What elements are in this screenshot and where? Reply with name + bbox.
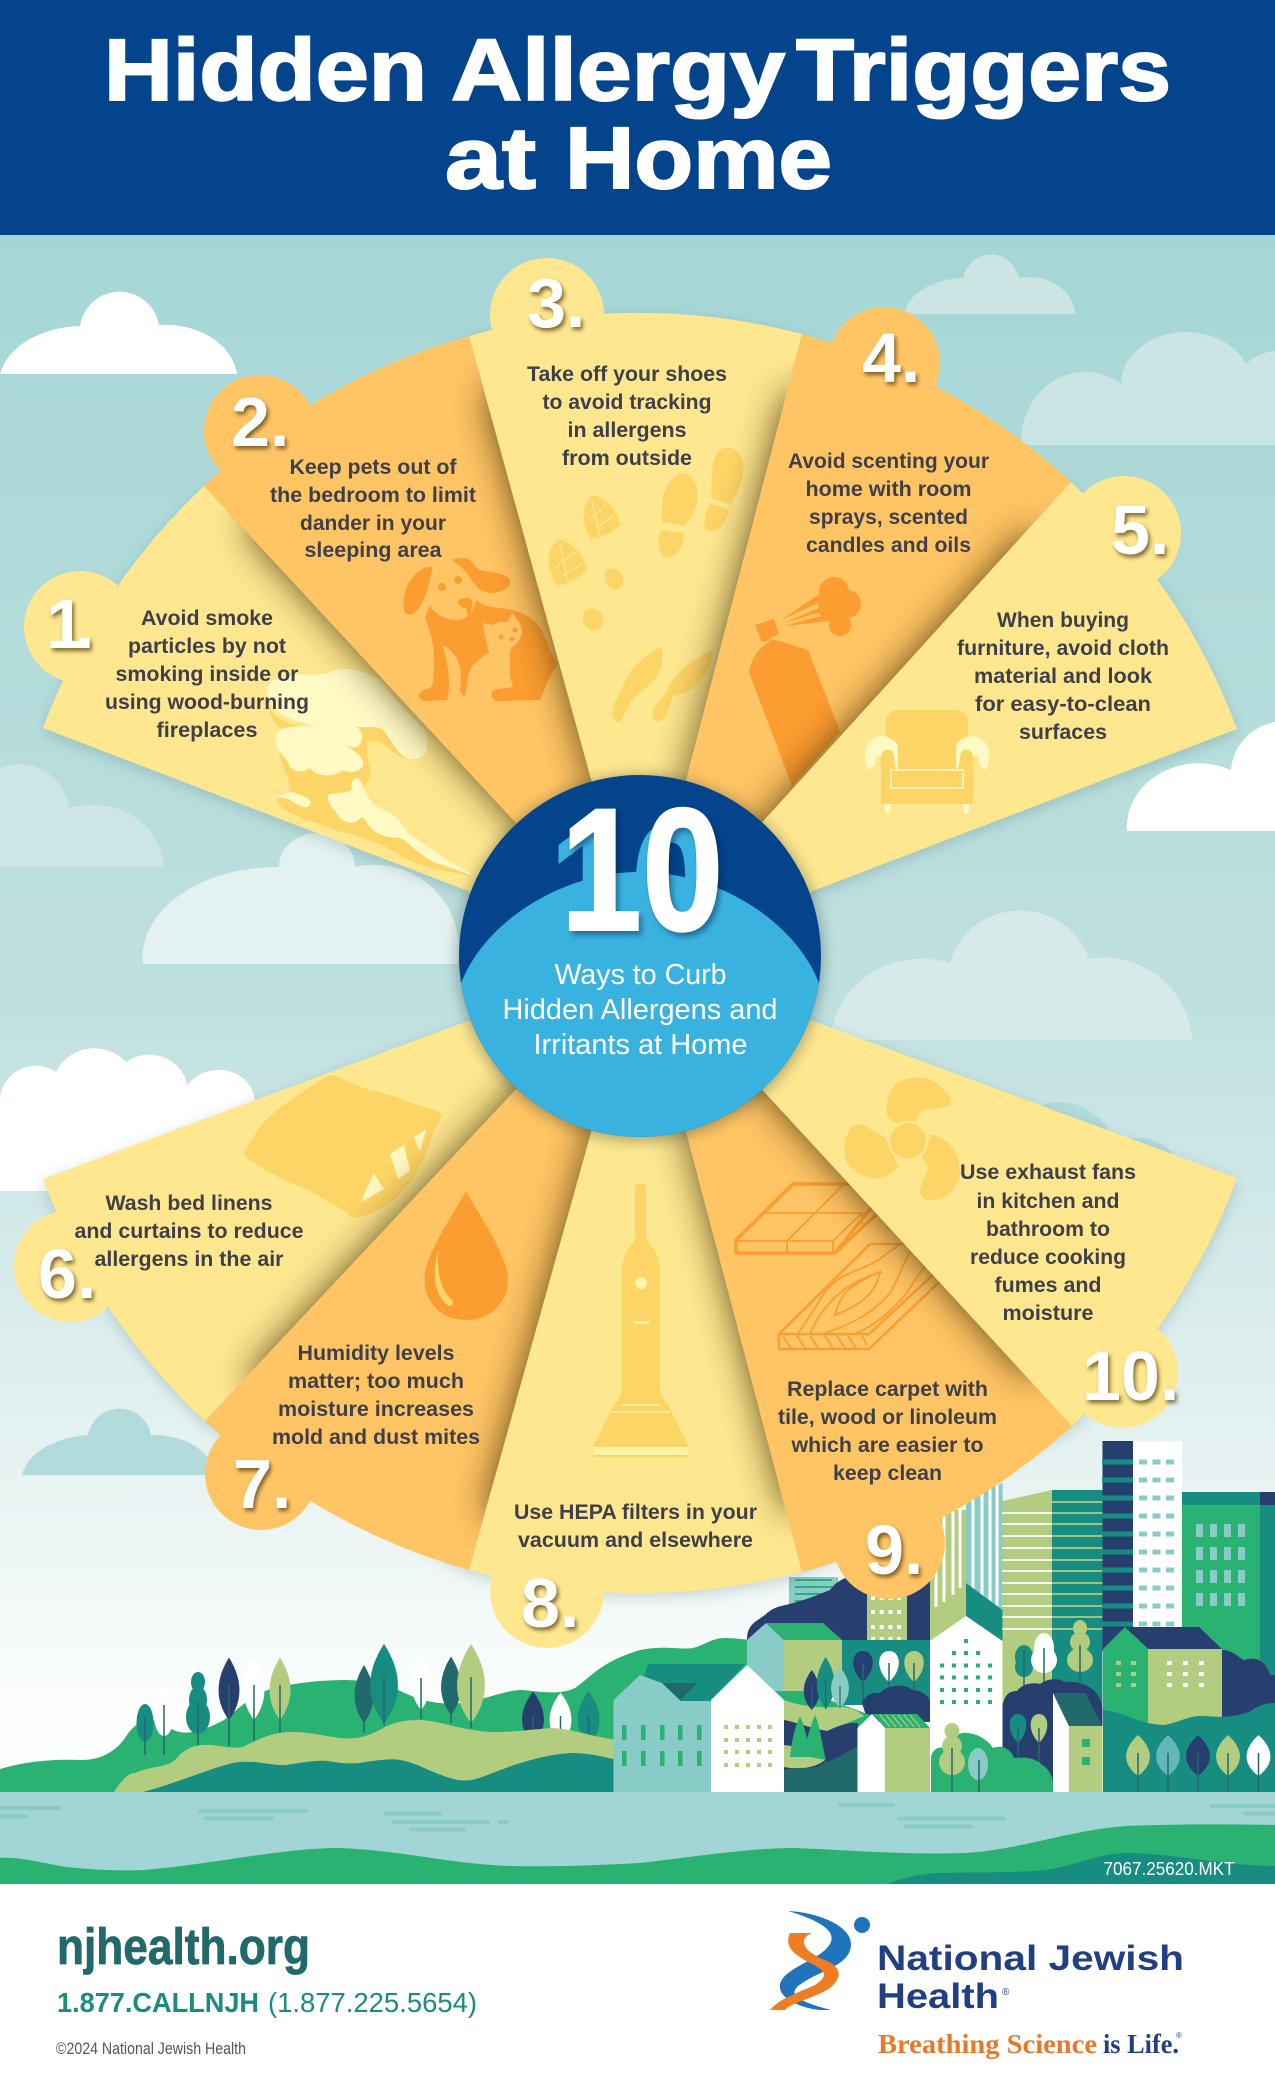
icon: smoke — [267, 669, 474, 877]
panel 2: pets — [204, 336, 640, 957]
text: panel 4: sprays, scented — [809, 505, 968, 529]
center subtitle — [502, 959, 778, 1061]
logo: National Jewish Health: is Life. — [1103, 2029, 1179, 2059]
sky background — [0, 235, 1275, 1885]
footer contact block: ©2024 National Jewish Health — [56, 2039, 246, 2058]
text: panel 1: using wood-burning — [105, 690, 309, 714]
panel 10: exhaust fans — [640, 957, 1237, 1428]
text: panel 5: When buying — [997, 608, 1129, 632]
logo: National Jewish Health: National Jewish — [877, 1939, 1184, 1978]
text: panel 2: dander in your — [300, 511, 447, 535]
text: panel 2: the bedroom to limit — [270, 483, 476, 507]
text: panel 9: which are easier to — [791, 1433, 984, 1457]
step numbers: 4. — [862, 319, 920, 397]
icon: vacuum cleaner — [594, 1183, 688, 1457]
text: panel 10: Use exhaust fans — [960, 1160, 1136, 1184]
center subtitle: Irritants at Home — [534, 1029, 748, 1061]
text: panel 6 — [74, 1191, 304, 1271]
text: panel 10: fumes and — [994, 1273, 1102, 1297]
step numbers: 6. — [38, 1235, 96, 1313]
text: panel 9 — [778, 1377, 997, 1485]
text: panel 3 — [527, 362, 727, 470]
panel 3: shoes — [469, 258, 802, 957]
panel 9: carpet replacement — [640, 957, 1072, 1599]
icon: fan — [844, 1078, 960, 1200]
title banner: Hidden — [104, 22, 427, 119]
panel 6: bed linens — [14, 957, 640, 1421]
big number 10: 10 — [560, 773, 724, 968]
text: panel 10: in kitchen and — [976, 1189, 1120, 1213]
center subtitle: Ways to Curb — [554, 959, 726, 991]
icon: dog and cat — [404, 558, 558, 701]
job code: 7067.25620.MKT — [1104, 1859, 1235, 1879]
text: panel 10: bathroom to — [986, 1217, 1110, 1241]
text: panel 3: Take off your shoes — [527, 362, 727, 386]
icon: pillow — [244, 1075, 441, 1218]
landscape: hills and trees — [0, 1638, 760, 1792]
center subtitle: Hidden Allergens and — [502, 994, 778, 1026]
text: panel 6: and curtains to reduce — [74, 1219, 304, 1243]
text: panel 10 — [960, 1160, 1136, 1325]
step numbers: 7. — [233, 1445, 291, 1523]
text: panel 2: sleeping area — [304, 538, 443, 562]
text: panel 8: vacuum and elsewhere — [518, 1528, 753, 1552]
panel 8: HEPA filters — [469, 957, 802, 1648]
text: panel 5: surfaces — [1019, 720, 1107, 744]
step numbers: 8. — [521, 1564, 579, 1642]
text: panel 4 — [788, 449, 990, 557]
title banner: Allergy — [451, 22, 785, 119]
step numbers — [38, 264, 1179, 1642]
footer contact block — [56, 1918, 477, 2058]
text: panel 1: smoking inside or — [116, 662, 299, 686]
title banner: Triggers — [796, 22, 1171, 119]
text: panel 1: particles by not — [128, 634, 286, 658]
text: panel 2 — [270, 455, 476, 562]
city skyline — [614, 1441, 1275, 1792]
icon: helix mark — [770, 1911, 870, 2010]
text: panel 7: moisture increases — [278, 1397, 474, 1421]
step numbers: 2. — [231, 383, 289, 461]
step numbers: . — [75, 585, 94, 663]
logo: National Jewish Health: ® — [1176, 2031, 1182, 2040]
text: panel 1: Avoid smoke — [141, 606, 273, 630]
text: panel 10: reduce cooking — [970, 1245, 1126, 1269]
text: panel 7: matter; too much — [288, 1369, 464, 1393]
panel 5: furniture — [640, 476, 1237, 957]
step numbers: 3. — [527, 264, 585, 342]
title banner: at — [445, 110, 536, 207]
footer contact block: (1.877.225.5654) — [268, 1987, 477, 2018]
center circle shadow — [457, 775, 823, 1141]
text: panel 4: candles and oils — [806, 533, 971, 557]
text: panel 5: furniture, avoid cloth — [957, 636, 1169, 660]
step numbers: 10. — [1082, 1337, 1179, 1415]
icon: water drop — [424, 1191, 508, 1320]
logo: National Jewish Health: Health — [877, 1977, 999, 2016]
text: panel 1: fireplaces — [156, 718, 258, 742]
icon: spray can — [749, 577, 861, 786]
text: panel 5 — [957, 608, 1169, 744]
blue offset of number 10: 10 — [548, 789, 712, 984]
title banner — [0, 0, 1275, 235]
logo: National Jewish Health: ® — [1002, 1987, 1010, 1998]
text: panel 5: material and look — [974, 664, 1152, 688]
step numbers: 9. — [865, 1511, 923, 1589]
text: panel 8 — [514, 1500, 758, 1552]
text: panel 1 — [105, 606, 309, 742]
text: panel 7: mold and dust mites — [272, 1425, 480, 1449]
icon: armchair — [865, 710, 989, 814]
footer contact block: 1.877.CALLNJH — [57, 1987, 259, 2018]
text: panel 3: from outside — [562, 446, 692, 470]
text: panel 9: keep clean — [833, 1461, 942, 1485]
center circle — [458, 773, 822, 1140]
logo: National Jewish Health: Breathing Science — [878, 2029, 1097, 2059]
clouds — [0, 254, 1275, 1475]
text: panel 7 — [272, 1341, 480, 1449]
panel 7: humidity — [205, 957, 640, 1570]
step numbers: 5. — [1111, 491, 1169, 569]
logo: National Jewish Health — [770, 1911, 1184, 2059]
text: panel 9: tile, wood or linoleum — [778, 1405, 997, 1429]
fan soft shadow on sky — [43, 317, 1237, 1597]
text: panel 4: Avoid scenting your — [788, 449, 990, 473]
panel 1: smoke — [24, 486, 640, 957]
text: panel 6: Wash bed linens — [106, 1191, 273, 1215]
river with ripples and foreground hills — [0, 1792, 1275, 1884]
text: panel 5: for easy-to-clean — [975, 692, 1151, 716]
text: panel 3: to avoid tracking — [542, 390, 712, 414]
panel 4: sprays — [640, 307, 1071, 957]
text: panel 8: Use HEPA filters in your — [514, 1500, 758, 1524]
text: panel 3: in allergens — [568, 418, 687, 442]
text: panel 2: Keep pets out of — [290, 455, 457, 479]
footer contact block: njhealth.org — [57, 1918, 310, 1975]
text: panel 4: home with room — [806, 477, 972, 501]
text: panel 9: Replace carpet with — [787, 1377, 988, 1401]
step numbers: 1 — [46, 585, 85, 663]
icon: tile and wood planks — [736, 1184, 960, 1349]
text: panel 6: allergens in the air — [94, 1247, 284, 1271]
icon: footprints — [549, 447, 743, 722]
text: panel 7: Humidity levels — [298, 1341, 455, 1365]
title banner: Home — [565, 110, 832, 207]
text: panel 10: moisture — [1002, 1301, 1094, 1325]
